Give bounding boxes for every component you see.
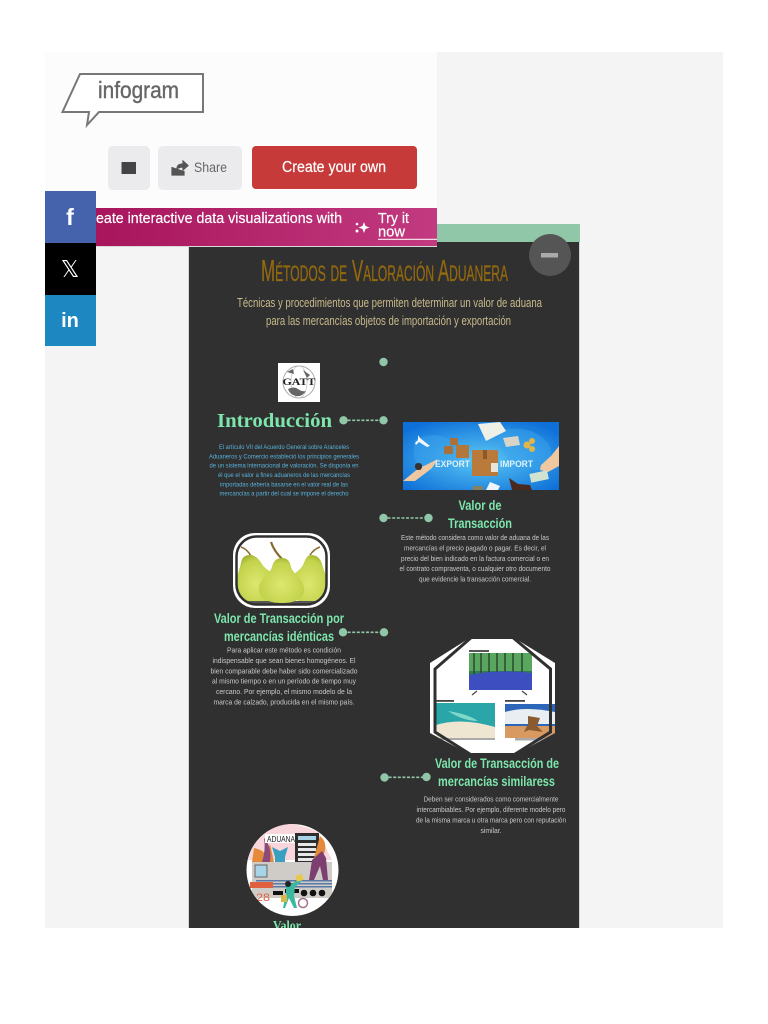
text: mercancías idénticas body <box>210 648 358 706</box>
image: pears <box>233 533 330 608</box>
heading: Valor de Transacción: Transacción <box>448 516 512 531</box>
text: Valor de Transacción body: el contrato compraventa, o cualquier otro documento <box>400 566 551 573</box>
image: aduana illustration <box>246 823 338 916</box>
text: Valor de Transacción body: que evidencie la transacción comercial. <box>419 576 531 584</box>
create your own button: Create your own <box>282 159 386 176</box>
heading: Introducción: Introducción <box>217 410 332 432</box>
text: mercancías idénticas body: Para aplicar este método es condición <box>227 648 341 654</box>
text: mercancías similares body: Deben ser considerados como comercialmente <box>424 796 559 804</box>
text: Valor de Transacción body: mercancías el precio pagado o pagar. Es decir, el <box>404 546 546 552</box>
share button <box>158 146 242 190</box>
social share buttons <box>45 191 96 346</box>
text: mercancías idénticas body: al mismo tiempo o en un período de tiempo muy <box>212 679 356 686</box>
icon: GATT logo: GATT <box>282 378 316 388</box>
text: mercancías idénticas body: cercano. Por ejemplo, el mismo modelo de la <box>216 689 352 696</box>
infogram logo <box>62 74 203 125</box>
timeline start dot <box>379 358 388 366</box>
text: Introducción body: él que el valor a fines aduaneros de las mercancías <box>218 472 350 479</box>
create your own button <box>252 146 417 189</box>
promo banner: Try it <box>378 211 409 227</box>
text: mercancías similares body: de la misma marca u otra marca pero con reputación <box>416 818 566 824</box>
image: export import: IMPORT <box>500 459 533 469</box>
title: Métodos de Valoración Aduanera <box>261 253 508 288</box>
social share buttons: in <box>61 310 79 332</box>
social share buttons: f <box>66 204 74 230</box>
fullscreen button <box>108 146 150 190</box>
text: Introducción body: importadas debería basarse en el valor real de las <box>220 481 348 488</box>
heading: Valor de Transacción de mercancías similaress <box>435 756 559 789</box>
text: mercancías similares body <box>416 796 566 835</box>
heading: Valor de Transacción por mercancías idénticas: Valor de Transacción por <box>214 611 345 626</box>
connector: Introducción <box>339 416 388 424</box>
text: Valor de Transacción body: precio del bien indicado en la factura comercial o en <box>401 556 549 563</box>
social share buttons: 𝕏 <box>61 257 79 283</box>
image: aduana illustration: 28 <box>256 892 270 904</box>
header background <box>45 52 437 209</box>
icon: GATT logo <box>278 363 320 402</box>
text: mercancías idénticas body: marca de calzado, producida en el mismo país. <box>214 700 355 706</box>
text: Introducción body: Aduaneros y Comercio estableció los principios generales <box>209 453 359 460</box>
connector: mercancías idénticas <box>339 628 388 636</box>
text: Introducción body <box>209 444 359 498</box>
text: mercancías idénticas body: indispensable que sean bienes homogéneos. El <box>212 658 356 665</box>
page background panel <box>45 52 723 928</box>
image: export import <box>403 422 559 490</box>
heading: Valor de Transacción por mercancías idénticas: mercancías idénticas <box>224 629 334 644</box>
heading: Valor: Valor <box>273 918 301 933</box>
image: televisions <box>430 639 555 753</box>
text: Introducción body: de un sistema internacional de valoración. Se disponía en <box>210 463 359 470</box>
share button: Share <box>194 159 227 175</box>
text: mercancías similares body: intercambiables. Por ejemplo, diferente modelo pero <box>416 807 566 814</box>
infographic panel <box>188 224 580 928</box>
heading: Valor de Transacción de mercancías similaress: mercancías similaress <box>438 774 555 789</box>
heading: Valor de Transacción: Valor de <box>458 498 502 513</box>
text: Introducción body: mercancías a partir del cual se impone el derecho <box>220 491 349 498</box>
subtitle <box>237 295 543 328</box>
text: mercancías similares body: similar. <box>480 828 502 835</box>
image: aduana illustration: ADUANA <box>267 835 296 844</box>
text: Valor de Transacción body: Este método considera como valor de aduana de las <box>401 535 549 542</box>
subtitle: para las mercancías objetos de importación y exportación <box>266 313 511 328</box>
connector: mercancías similares <box>380 773 431 782</box>
heading: Valor de Transacción por mercancías idénticas <box>214 611 345 644</box>
infogram logo: infogram <box>98 77 179 103</box>
text: Valor de Transacción body <box>400 535 551 584</box>
promo banner: now <box>378 224 406 240</box>
promo banner: eate interactive data visualizations with <box>96 211 342 227</box>
promo banner <box>96 208 437 247</box>
collapse button <box>529 234 571 276</box>
image: export import: EXPORT <box>435 459 470 469</box>
subtitle: Técnicas y procedimientos que permiten determinar un valor de aduana <box>237 295 543 310</box>
connector: Valor de Transacción <box>379 514 433 522</box>
text: Introducción body: El artículo VII del Acuerdo General sobre Aranceles <box>219 444 349 451</box>
heading: Valor de Transacción de mercancías similaress: Valor de Transacción de <box>435 756 559 771</box>
heading: Valor de Transacción <box>448 498 512 531</box>
text: mercancías idénticas body: bien comparable debe haber sido comercializado <box>210 668 358 676</box>
